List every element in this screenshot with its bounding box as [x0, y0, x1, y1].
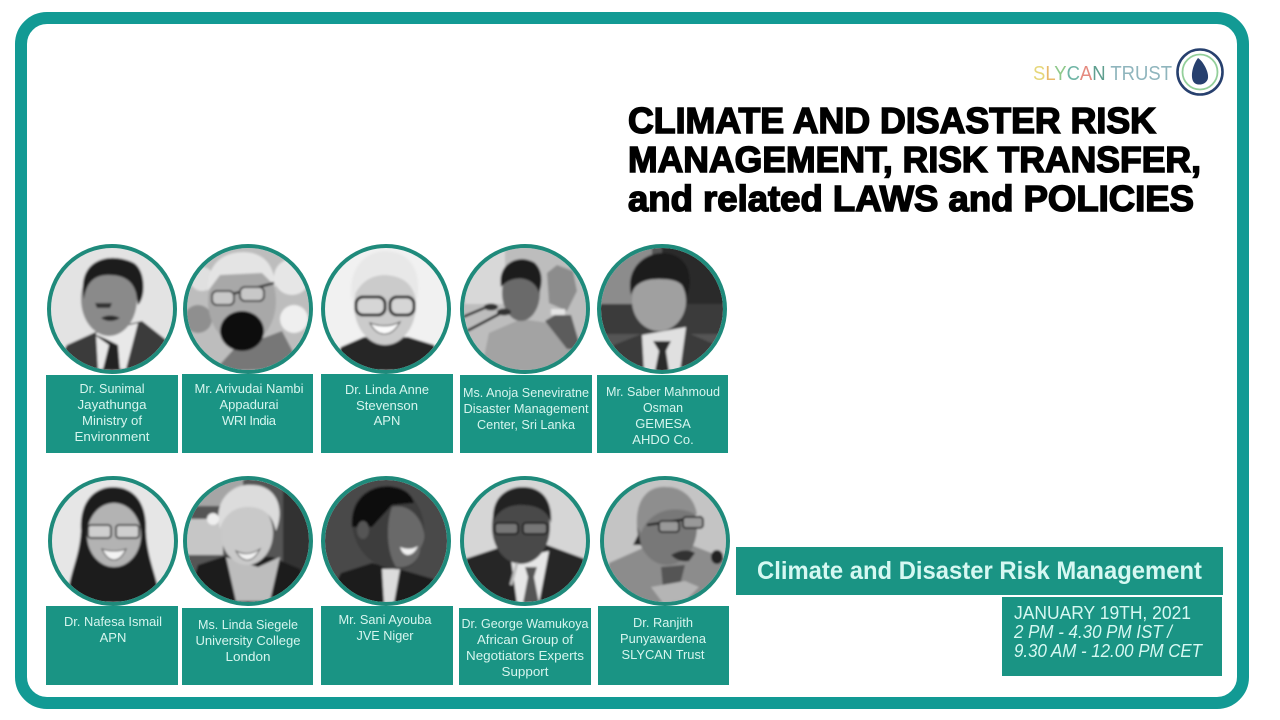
caption box: APN [374, 413, 400, 428]
caption box: AHDO Co. [632, 432, 694, 447]
caption box [598, 606, 729, 685]
caption box: Ms. Linda Siegele [198, 617, 298, 632]
date and time box [1002, 597, 1222, 676]
caption box: Dr. Ranjith [633, 615, 693, 630]
caption box [321, 606, 453, 685]
portrait: Mr. Sani Ayouba [321, 476, 451, 606]
caption box: Environment [74, 429, 150, 444]
caption box: WRI India [222, 413, 277, 428]
caption box: Jayathunga [78, 397, 147, 412]
caption box: Mr. Saber Mahmoud [606, 384, 720, 399]
portrait: Dr. Nafesa Ismail [48, 476, 178, 606]
portrait: Dr. Linda Anne Stevenson [321, 244, 451, 374]
caption box: Dr. Nafesa Ismail [64, 614, 162, 629]
caption box [182, 608, 313, 685]
title: MANAGEMENT, RISK TRANSFER, [628, 139, 1201, 180]
caption box [460, 375, 592, 453]
portrait: Dr. George Wamukoya [460, 476, 590, 606]
caption box [459, 608, 591, 685]
caption box [182, 374, 313, 453]
speaker: Dr. Ranjith Punyawardena [598, 476, 730, 685]
title: CLIMATE AND DISASTER RISK [628, 100, 1156, 141]
caption box [597, 375, 728, 453]
logo: SLYCAN Trust [1033, 50, 1222, 94]
portrait: Ms. Anoja Seneviratne [460, 244, 590, 374]
speaker: Ms. Linda Siegele [182, 476, 313, 685]
caption box: Dr. George Wamukoya [462, 616, 589, 631]
caption box: Stevenson [356, 398, 418, 413]
date and time box: JANUARY 19TH, 2021 [1014, 603, 1191, 623]
caption box: Disaster Management [464, 401, 589, 416]
caption box: JVE Niger [356, 628, 414, 643]
speaker: Dr. Nafesa Ismail [46, 476, 178, 685]
caption box: London [226, 649, 270, 664]
session banner: Climate and Disaster Risk Management [757, 557, 1203, 585]
caption box: Mr. Sani Ayouba [338, 612, 432, 627]
caption box: Support [502, 664, 549, 679]
caption box: Mr. Arivudai Nambi [194, 381, 304, 396]
speaker: Mr. Arivudai Nambi Appadurai [182, 244, 313, 453]
portrait: Mr. Saber Mahmoud Osman [597, 244, 727, 374]
speaker: Dr. Linda Anne Stevenson [321, 244, 453, 453]
caption box: Ms. Anoja Seneviratne [463, 385, 589, 400]
speaker: Mr. Saber Mahmoud Osman [597, 244, 728, 453]
caption box: Appadurai [220, 397, 279, 412]
caption box: SLYCAN Trust [622, 647, 705, 662]
caption box: Ministry of [82, 413, 142, 428]
portrait: Dr. Ranjith Punyawardena [600, 476, 730, 606]
caption box: African Group of [477, 632, 573, 647]
logo: SLYCAN Trust: SLYCAN TRUST [1033, 63, 1172, 85]
portrait: Ms. Linda Siegele [183, 476, 313, 606]
caption box [321, 374, 453, 453]
speaker: Ms. Anoja Seneviratne [460, 244, 592, 453]
speaker: Mr. Sani Ayouba [321, 476, 453, 685]
caption box: Negotiators Experts [466, 648, 585, 663]
speaker: Dr. George Wamukoya [459, 476, 591, 685]
caption box: University College [196, 633, 300, 648]
title: and related LAWS and POLICIES [628, 178, 1194, 219]
caption box: Osman [643, 400, 683, 415]
caption box: APN [100, 630, 126, 645]
speaker: Dr. Sunimal Jayathunga [46, 244, 178, 453]
caption box: Dr. Linda Anne [345, 382, 429, 397]
portrait: Mr. Arivudai Nambi Appadurai [183, 244, 313, 374]
caption box: Dr. Sunimal [80, 381, 145, 396]
portrait: Dr. Sunimal Jayathunga [47, 244, 177, 374]
caption box [46, 375, 178, 453]
date and time box: 9.30 AM - 12.00 PM CET [1014, 641, 1204, 661]
caption box: GEMESA [635, 416, 691, 431]
caption box [46, 606, 178, 685]
title [628, 100, 1201, 219]
caption box: Punyawardena [620, 631, 707, 646]
caption box: Center, Sri Lanka [477, 417, 576, 432]
session banner [736, 547, 1223, 595]
date and time box: 2 PM - 4.30 PM IST / [1013, 622, 1174, 642]
